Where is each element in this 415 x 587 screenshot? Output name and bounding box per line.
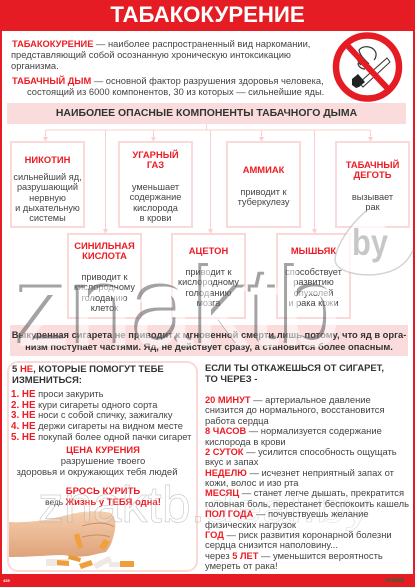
card: hydrocyanic acid: голоданию — [82, 293, 128, 303]
right column heading — [205, 362, 384, 384]
card: arsenic — [276, 233, 351, 319]
right column heading: ЕСЛИ ТЫ ОТКАЖЕШЬСЯ ОТ СИГАРЕТ, — [205, 362, 384, 373]
card: carbon monoxide: в крови — [140, 213, 171, 223]
title banner: ТАБАКОКУРЕНИЕ — [110, 2, 305, 27]
photo: fist crushing cigarettes — [9, 511, 134, 569]
timeline of recovery: снизится до нормального, восстановится — [205, 404, 385, 415]
timeline of recovery: умереть от рака! — [205, 560, 278, 571]
card: hydrocyanic acid: приводит к — [81, 272, 128, 282]
card: nicotine: разрушающий — [17, 182, 78, 192]
timeline of recovery: головная боль, перестанет беспокоить кашель — [205, 498, 409, 509]
intro text: организма. — [11, 61, 59, 71]
card: ammonia: АММИАК — [243, 164, 284, 175]
card: nicotine: нервную — [29, 193, 66, 203]
card: arsenic: и рака кожи — [288, 298, 339, 308]
timeline of recovery: ГОД — риск развития коронарной болезни — [205, 529, 392, 540]
card: tar: вызывает — [352, 192, 393, 202]
card: hydrocyanic acid: клеток — [91, 303, 118, 313]
timeline of recovery: кислорода в крови — [205, 436, 286, 447]
list of five rules: 1. НЕ проси закурить — [11, 389, 104, 400]
timeline of recovery: через 5 ЛЕТ — уменьшится вероятность — [205, 550, 383, 561]
card: hydrocyanic acid: кислородному — [74, 282, 135, 292]
card: tar — [335, 141, 410, 228]
smoking cost text: здоровья и окружающих тебя людей — [16, 467, 178, 478]
card: nicotine: и дыхательную — [15, 203, 80, 213]
card: acetone: АЦЕТОН — [189, 245, 228, 256]
right column heading: ТО ЧЕРЕЗ - — [205, 373, 257, 384]
card: acetone: кислородному — [178, 277, 239, 287]
warning band: Выкуренная сигарета не приводит к мгновенной смерти лишь потому, что яд в орга- — [12, 330, 406, 340]
card: arsenic: опухолей — [294, 288, 333, 298]
list of five rules: 2. НЕ кури сигареты одного сорта — [11, 400, 157, 411]
timeline of recovery: сердца снизится наполовину... — [205, 539, 338, 550]
timeline of recovery: НЕДЕЛЮ — исчезнет неприятный запах от — [205, 467, 394, 478]
warning band — [10, 325, 408, 356]
card: tar: ТАБАЧНЫЙ — [346, 159, 399, 170]
icon: no smoking sign — [332, 32, 402, 102]
card: nicotine: сильнейший яд, — [13, 172, 82, 182]
timeline of recovery: физических нагрузок — [205, 519, 296, 530]
watermark: deal.by — [205, 487, 370, 531]
timeline of recovery: вкус и запах — [205, 456, 258, 467]
panel heading — [12, 364, 164, 386]
timeline of recovery: МЕСЯЦ — станет легче дышать, прекратится — [205, 487, 404, 498]
timeline of recovery: кожи, волос и изо рта — [205, 477, 298, 488]
timeline of recovery: работа сердца — [205, 415, 269, 426]
card: carbon monoxide — [118, 141, 193, 228]
card: tar: ДЕГОТЬ — [354, 169, 391, 180]
card: arsenic: МЫШЬЯК — [291, 245, 336, 256]
smoking cost text — [16, 444, 178, 478]
card: acetone — [171, 233, 246, 319]
card: nicotine: НИКОТИН — [25, 154, 70, 165]
footer brand: znaktb — [385, 578, 404, 584]
card: hydrocyanic acid: КИСЛОТА — [82, 250, 127, 261]
timeline of recovery: 8 ЧАСОВ — нормализуется содержание — [205, 425, 382, 436]
panel: five no's — [7, 361, 198, 572]
watermark: znaktb — [13, 244, 338, 367]
intro text: представляющий собой осознанную хроническую интоксикацию — [11, 50, 291, 60]
list of five rules: 4. НЕ держи сигареты на видном месте — [11, 421, 183, 432]
card: tar: рак — [365, 202, 380, 212]
quit smoking call: ведь Жизнь у ТЕБЯ одна! — [45, 497, 161, 508]
quit smoking call — [45, 486, 161, 508]
smoking cost text: разрушение твоего — [61, 456, 145, 467]
card: ammonia: туберкулезу — [238, 197, 289, 207]
intro text — [11, 39, 324, 97]
intro text: состоящий из 6000 компонентов, 30 из которых — сильнейшие яды. — [27, 87, 324, 97]
heading band: most dangerous components: НАИБОЛЕЕ ОПАСНЫЕ КОМПОНЕНТЫ ТАБАЧНОГО ДЫМА — [56, 108, 357, 119]
card: hydrocyanic acid: СИНИЛЬНАЯ — [74, 240, 135, 251]
panel heading: 5 НЕ, КОТОРЫЕ ПОМОГУТ ТЕБЕ — [12, 364, 164, 375]
card: carbon monoxide: уменьшает — [132, 182, 179, 192]
warning band: низм поступает частями. Яд, не действует сразу, а становится более опасным. — [25, 342, 393, 352]
card: nicotine: системы — [29, 213, 66, 223]
card: ammonia: приводит к — [240, 187, 287, 197]
card: arsenic: развитию — [293, 277, 334, 287]
card: hydrocyanic acid — [67, 233, 142, 319]
intro text: ТАБАЧНЫЙ ДЫМ — основной фактор разрушения здоровья человека, — [12, 76, 324, 86]
card: acetone: приводит к — [185, 267, 232, 277]
card: carbon monoxide: содержание — [130, 192, 181, 202]
quit smoking call: БРОСЬ КУРИТЬ — [66, 486, 140, 497]
card: carbon monoxide: кислорода — [133, 203, 178, 213]
watermark: znaktb. — [38, 476, 205, 533]
smoking cost text: ЦЕНА КУРЕНИЯ — [66, 444, 140, 455]
timeline of recovery: ПОЛ ГОДА — почувствуешь желание — [205, 508, 369, 519]
footer code: 439 — [3, 578, 10, 583]
timeline of recovery: 2 СУТОК — усилится способность ощущать — [205, 446, 397, 457]
footer band — [0, 574, 415, 587]
watermark — [18, 210, 414, 531]
timeline of recovery — [205, 394, 409, 571]
list of five rules — [11, 389, 192, 443]
card: acetone: мозга — [197, 298, 220, 308]
card: carbon monoxide: УГАРНЫЙ — [132, 149, 179, 160]
timeline of recovery: 20 МИНУТ — артериальное давление — [205, 394, 371, 405]
panel heading: ИЗМЕНИТЬСЯ: — [12, 374, 82, 386]
card: ammonia — [226, 141, 301, 228]
list of five rules: 3. НЕ носи с собой спичку, зажигалку — [11, 410, 172, 421]
connector arrows — [43, 124, 373, 233]
title banner — [0, 0, 415, 31]
watermark: by — [352, 222, 388, 263]
card: arsenic: способствует — [285, 267, 342, 277]
card: carbon monoxide: ГАЗ — [147, 159, 164, 170]
list of five rules: 5. НЕ покупай более одной пачки сигарет — [11, 432, 191, 443]
heading band: most dangerous components — [7, 103, 406, 124]
intro text: ТАБАКОКУРЕНИЕ — наиболее распространенный вид наркомании, — [12, 39, 310, 49]
card: acetone: голоданию — [186, 288, 232, 298]
card: nicotine — [10, 141, 85, 228]
watermark: znaktb — [16, 247, 341, 370]
